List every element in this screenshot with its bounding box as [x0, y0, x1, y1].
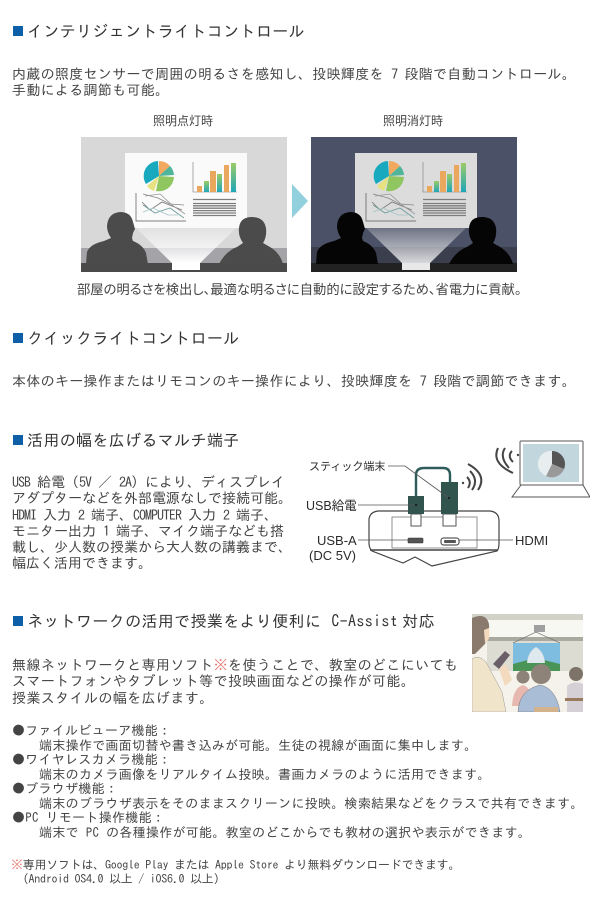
- heading: intelligent light control: インテリジェントライトコントロール: [27, 23, 305, 39]
- label: lights off: 照明消灯時: [383, 112, 443, 129]
- label: USB-A: USB-A: [317, 533, 357, 548]
- text block: network description: 無線ネットワークと専用ソフト※を使うことで、教室のどこにいても スマートフォンやタブレット等で投映画面などの操作が可能。 授業スタイルの幅を広げます。: [12, 658, 458, 705]
- text block: quick light description: 本体のキー操作またはリモコンのキー操作により、投映輝度を 7 段階で調節できます。: [12, 374, 576, 388]
- label: DC 5V: (DC 5V): [309, 548, 356, 563]
- callout lines: [358, 466, 513, 540]
- arrow: lights on to lights off: [292, 184, 308, 218]
- text block: intelligent light description: 内蔵の照度センサーで周囲の明るさを感知し、投映輝度を 7 段階で自動コントロール。 手動による調節も可能。: [12, 67, 576, 97]
- label: lights on: 照明点灯時: [153, 112, 213, 129]
- caption: power saving: 部屋の明るさを検出し、最適な明るさに自動的に設定するため、省電力に貢献。: [77, 279, 521, 298]
- label: USB power: USB給電: [306, 499, 357, 513]
- heading: multi terminals: 活用の幅を広げるマルチ端子: [27, 432, 240, 448]
- label: stick terminal: スティック端末: [309, 459, 385, 473]
- text block: terminals description: USB 給電（5V ／ 2A）により、ディスプレイ アダプターなどを外部電源なしで接続可能。 HDMI 入力 2 端子、COMPUTER 入力 2 端子、 モニター出力 1 端子、マイク端子なども搭 載し、少人数の授業から大人数の講義まで、 幅広く活用できます。: [12, 475, 292, 570]
- stick device and cable: [408, 468, 458, 526]
- icon: laptop: [512, 441, 590, 497]
- list: features: ●ファイルビューア機能： 端末操作で画面切替や書き込みが可能。生徒の視線が画面に集中します。 ●ワイヤレスカメラ機能： 端末のカメラ画像をリアルタイム投映。書画カメラのように活用できます。 ●ブラウザ機能： 端末のブラウザ表示をそのままスクリーンに投映。検索結果などをクラスで共有できます。 ●PC リモート操作機能： 端末で PC の各種操作が可能。教室のどこからでも教材の選択や表示ができます。: [12, 724, 584, 839]
- diagram: projector terminals: [306, 440, 590, 567]
- projector body: [369, 511, 499, 566]
- icon: laptop wireless waves: [496, 448, 519, 473]
- illustration: lights off room: [311, 137, 517, 272]
- heading: quick light control: クイックライトコントロール: [27, 330, 240, 346]
- illustration: lights on room: [81, 137, 287, 272]
- illustration: classroom: [472, 614, 583, 712]
- label: HDMI: HDMI: [515, 533, 548, 548]
- icon: stick wireless waves: [462, 464, 481, 490]
- footnote: ※専用ソフトは、Google Play または Apple Store より無料ダウンロードできます。 （Android OS4.0 以上 / iOS6.0 以上）: [11, 859, 460, 885]
- heading: network: ネットワークの活用で授業をより便利に C-Assist対応: [27, 613, 435, 629]
